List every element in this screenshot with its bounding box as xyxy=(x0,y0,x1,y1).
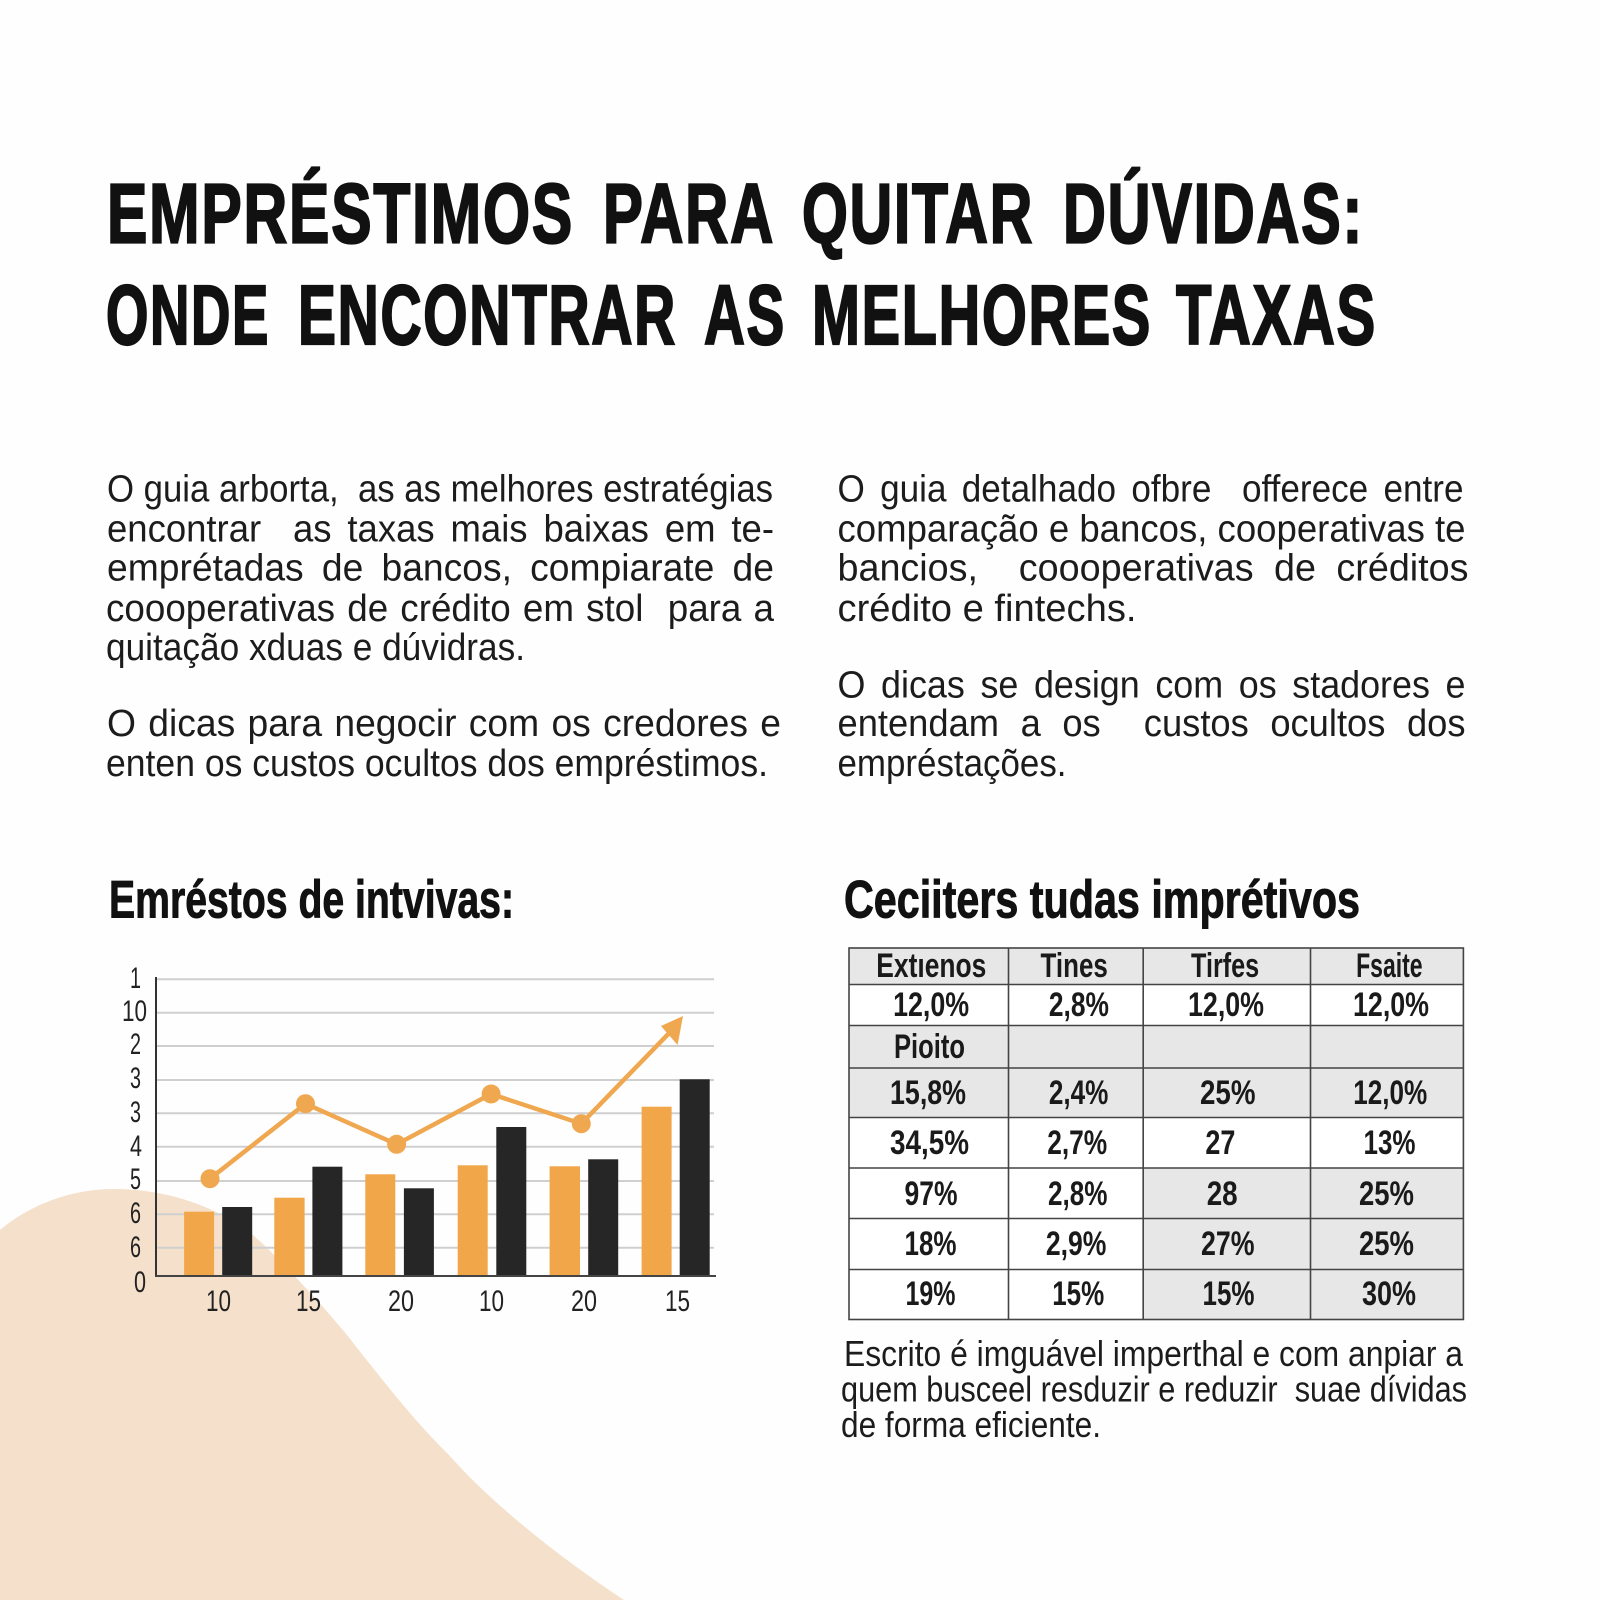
title: ENCONTRAR xyxy=(298,268,677,362)
table header row: Tines xyxy=(1040,947,1108,985)
table row 1: 2,8% xyxy=(1049,986,1109,1024)
table row 1: 12,0% xyxy=(893,986,969,1024)
text block: right column xyxy=(838,469,1468,785)
x axis labels: 20 xyxy=(388,1285,414,1318)
table header row: Extıenos xyxy=(876,947,986,985)
y axis labels: 6 xyxy=(130,1197,141,1230)
table row 5: 2,8% xyxy=(1048,1175,1108,1213)
text block: table footnote: de forma eficiente. xyxy=(841,1404,1101,1445)
text block: right column: empréstações. xyxy=(838,743,1066,785)
table row 5: 28 xyxy=(1207,1175,1238,1213)
text block: right column: comparação e bancos, cooperativas te xyxy=(838,509,1466,551)
y axis labels: 1 xyxy=(130,962,141,995)
text block: table footnote: Escrito é imguável imperthal e com anpiar a xyxy=(844,1333,1464,1374)
text block: left column: encontrar as taxas mais baixas em te- xyxy=(107,509,774,551)
table row 5: 97% xyxy=(904,1175,958,1213)
title: PARA xyxy=(603,166,775,260)
text block: left column: quitação xduas e dúvidras. xyxy=(106,627,525,669)
text block: left column xyxy=(106,469,781,785)
table row 7: 19% xyxy=(906,1275,956,1313)
table row 4: 27 xyxy=(1205,1124,1235,1162)
table header row: Tirfes xyxy=(1191,947,1259,985)
y axis labels: 3 xyxy=(130,1096,141,1129)
table row 1: 12,0% xyxy=(1353,986,1429,1024)
table row 4: 13% xyxy=(1364,1124,1416,1162)
table row 1: 12,0% xyxy=(1188,986,1264,1024)
x axis labels: 10 xyxy=(206,1285,231,1318)
table row 6: 25% xyxy=(1359,1225,1414,1263)
y axis labels: 5 xyxy=(130,1163,141,1196)
title: ONDE xyxy=(106,268,270,362)
table row 3: 2,4% xyxy=(1049,1074,1108,1112)
table row 3 xyxy=(890,1074,1427,1112)
text block: right column: crédito e fintechs. xyxy=(838,588,1136,630)
y axis labels: 2 xyxy=(130,1028,141,1061)
table row 4: 2,7% xyxy=(1047,1124,1107,1162)
bars xyxy=(184,1079,710,1276)
y axis labels: 6 xyxy=(130,1231,141,1264)
y axis labels: 0 xyxy=(134,1266,146,1299)
title: MELHORES xyxy=(812,268,1152,362)
heading: table: Ceciiters tudas imprétivos xyxy=(844,870,1360,930)
title xyxy=(106,166,1377,362)
table row 3: 25% xyxy=(1200,1074,1256,1112)
table row 7: 30% xyxy=(1362,1275,1416,1313)
text block: table footnote xyxy=(841,1333,1467,1445)
title: AS xyxy=(704,268,786,362)
table row 3: 15,8% xyxy=(890,1074,966,1112)
text block: left column: O dicas para negocir com os credores e xyxy=(107,703,781,745)
table row 4: 34,5% xyxy=(890,1124,969,1162)
title: QUITAR xyxy=(802,166,1034,260)
decorative peach wave background xyxy=(0,1189,624,1600)
text block: right column: bancios, coooperativas de créditos xyxy=(838,548,1468,590)
table row 5 xyxy=(904,1175,1414,1213)
text block: left column: coooperativas de crédito em stol para a xyxy=(106,588,775,630)
table row 2: Pioito xyxy=(894,1028,965,1066)
chart: bars and trend line xyxy=(122,962,716,1318)
table row 5: 25% xyxy=(1359,1175,1414,1213)
x axis labels: 10 xyxy=(479,1285,504,1318)
table row 7 xyxy=(906,1275,1416,1313)
table row 4 xyxy=(890,1124,1416,1162)
text block: right column: O dicas se design com os stadores e xyxy=(838,664,1466,706)
y axis labels: 3 xyxy=(130,1062,141,1095)
table row 6: 18% xyxy=(904,1225,956,1263)
text block: left column: enten os custos ocultos dos empréstimos. xyxy=(106,743,768,785)
text block: left column: emprétadas de bancos, compiarate de xyxy=(107,548,774,590)
title: DÚVIDAS: xyxy=(1063,166,1364,260)
table row 3: 12,0% xyxy=(1353,1074,1427,1112)
text block: right column: entendam a os custos ocultos dos xyxy=(838,703,1466,745)
table row 6: 27% xyxy=(1201,1225,1254,1263)
y axis labels: 4 xyxy=(130,1130,142,1163)
title: EMPRÉSTIMOS xyxy=(107,166,574,260)
table row 1 xyxy=(893,986,1429,1024)
heading: chart: Emréstos de intvivas: xyxy=(109,870,514,930)
table row 6 xyxy=(904,1225,1414,1263)
table row 7: 15% xyxy=(1052,1275,1104,1313)
x axis labels: 15 xyxy=(665,1285,690,1318)
table xyxy=(849,947,1463,1320)
y axis labels xyxy=(122,962,147,1299)
table header row xyxy=(876,947,1423,985)
text block: left column: O guia arborta, as as melhores estratégias xyxy=(107,469,773,511)
text block: table footnote: quem busceel resduzir e reduzir suae dívidas xyxy=(841,1368,1467,1410)
table header row: Fsaite xyxy=(1356,947,1423,985)
x axis labels: 15 xyxy=(296,1285,321,1318)
trend line with arrow xyxy=(200,1016,683,1188)
text block: right column: O guia detalhado ofbre offerece entre xyxy=(838,469,1464,511)
table row 6: 2,9% xyxy=(1046,1225,1106,1263)
title: TAXAS xyxy=(1176,268,1377,362)
table row 7: 15% xyxy=(1202,1275,1254,1313)
y axis labels: 10 xyxy=(122,995,147,1028)
x axis labels xyxy=(206,1285,690,1318)
x axis labels: 20 xyxy=(571,1285,597,1318)
